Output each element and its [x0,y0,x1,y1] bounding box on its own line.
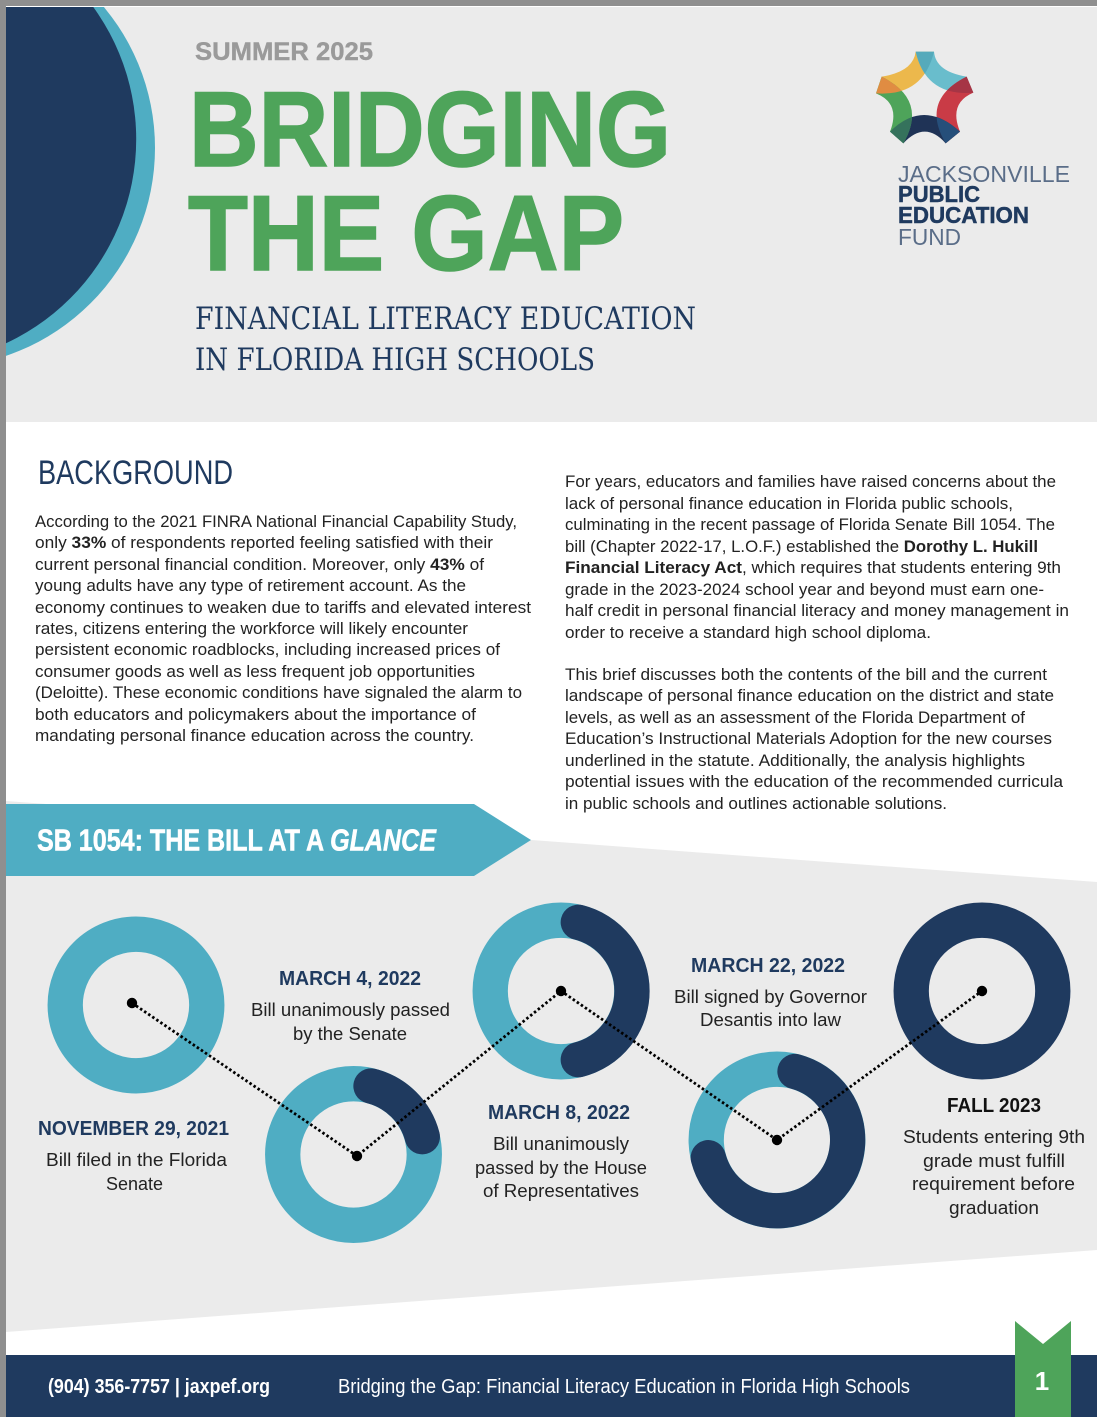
paragraph two: Education’s Instructional Materials Adoption for the new courses [565,729,1052,748]
paragraph one: culminating in the recent passage of Florida Senate Bill 1054. The [565,515,1055,534]
footer contact: (904) 356-7757 | jaxpef.org [48,1376,270,1398]
body text: rates, citizens entering the workforce will likely encounter [35,619,468,638]
title: THE GAP [188,173,624,293]
logo wordmark [898,161,1070,250]
body text: mandating personal finance education across the country. [35,726,474,745]
callout: Fall 2023: Students entering 9th [903,1127,1085,1147]
body text: economy continues to weaken due to tariffs and elevated interest [35,598,531,617]
callout: November 29, 2021 [38,1118,229,1194]
callout: Fall 2023: graduation [949,1198,1039,1218]
body text: only 33% of respondents reported feeling satisfied with their [35,533,493,552]
panel: header [0,0,1097,422]
paragraph one: For years, educators and families have raised concerns about the [565,472,1056,491]
callout: March 4, 2022: MARCH 4, 2022 [279,968,421,990]
body text: (Deloitte). These economic conditions have signaled the alarm to [35,683,522,702]
callout: March 8, 2022 [475,1102,647,1201]
page number ribbon: 1 [1035,1366,1049,1396]
paragraph two [565,665,1064,813]
panel: timeline band [6,801,1097,1332]
callout: November 29, 2021: Bill filed in the Florida [46,1150,228,1170]
body text [35,512,531,745]
callout: March 4, 2022: Bill unanimously passed [251,1000,450,1020]
icon: five-arc star [876,52,973,143]
callout: Fall 2023: grade must fulfill [923,1151,1065,1171]
paragraph two: in public schools and outlines actionable solutions. [565,794,947,813]
callout: March 8, 2022: passed by the House [475,1158,647,1178]
body text: consumer goods as well as less frequent job opportunities [35,662,475,681]
callout: March 22, 2022: Bill signed by Governor [674,987,867,1007]
paragraph one: grade in the 2023-2024 school year and beyond must earn one- [565,580,1044,599]
subtitle: IN FLORIDA HIGH SCHOOLS [195,342,595,378]
heading: BACKGROUND [38,454,233,492]
callout: March 22, 2022 [674,955,867,1030]
footer title: Bridging the Gap: Financial Literacy Education in Florida High Schools [338,1376,910,1398]
body text: According to the 2021 FINRA National Financial Capability Study, [35,512,517,531]
paragraph one: lack of personal finance education in Florida public schools, [565,494,1013,513]
callout: Fall 2023 [903,1095,1085,1218]
callout: November 29, 2021: Senate [106,1174,163,1194]
paragraph two: levels, as well as an assessment of the Florida Department of [565,708,1025,727]
callout: March 22, 2022: MARCH 22, 2022 [691,955,845,977]
paragraph one: bill (Chapter 2022-17, L.O.F.) established the Dorothy L. Hukill [565,537,1038,556]
callout: November 29, 2021: NOVEMBER 29, 2021 [38,1118,229,1140]
callout: Fall 2023: FALL 2023 [947,1095,1041,1117]
callout: March 4, 2022: by the Senate [293,1024,407,1044]
title: BRIDGING [189,69,671,189]
callout: March 8, 2022: MARCH 8, 2022 [488,1102,630,1124]
subtitle: FINANCIAL LITERACY EDUCATION [195,301,696,337]
season label: SUMMER 2025 [195,38,373,66]
page number ribbon [1015,1321,1071,1417]
body text: young adults have any type of retirement account. As the [35,576,466,595]
paragraph two: landscape of personal finance education on the district and state [565,686,1054,705]
logo wordmark: EDUCATION [898,202,1029,228]
logo wordmark: FUND [898,224,961,250]
subtitle [195,301,696,378]
paragraph two: underlined in the statute. Additionally, the analysis highlights [565,751,1025,770]
callout: March 8, 2022: of Representatives [483,1181,639,1201]
banner: SB 1054 [6,804,531,876]
ring: March 8 2022 [490,920,632,1062]
paragraph two: This brief discusses both the contents of the bill and the current [565,665,1047,684]
paragraph one: Financial Literacy Act , which requires that students entering 9th [565,558,1061,577]
logo wordmark: PUBLIC [898,181,980,207]
logo wordmark: JACKSONVILLE [898,161,1070,187]
paragraph one [565,472,1069,642]
callout: Fall 2023: requirement before [912,1174,1075,1194]
dotted connector line [127,986,987,1161]
ring: March 22 2022 [706,1069,848,1211]
paragraph one: order to receive a standard high school diploma. [565,623,931,642]
ring: March 4 2022 [283,1084,424,1225]
ring: Fall 2023 [911,920,1053,1062]
body text: persistent economic roadblocks, including increased prices of [35,640,500,659]
chart: timeline rings [65,920,1053,1225]
body text: current personal financial condition. Moreover, only 43% of [35,555,484,574]
logo: Jacksonville Public Education Fund [876,52,1070,250]
title [188,69,671,293]
banner: SB 1054: SB 1054: THE BILL AT A GLANCE [37,822,437,858]
paragraph one: half credit in personal financial literacy and money management in [565,601,1069,620]
paragraph two: potential issues with the education of the recommended curricula [565,772,1064,791]
callout: March 4, 2022 [251,968,450,1044]
body text: both educators and policymakers about the importance of [35,705,476,724]
panel: background right column [565,472,1069,813]
callout: March 8, 2022: Bill unanimously [493,1134,629,1154]
footer bar [6,1355,1097,1417]
callout: March 22, 2022: Desantis into law [700,1010,842,1030]
ring: November 2021 [65,934,207,1076]
decorative circles [0,0,155,367]
panel: background left column [35,454,531,745]
